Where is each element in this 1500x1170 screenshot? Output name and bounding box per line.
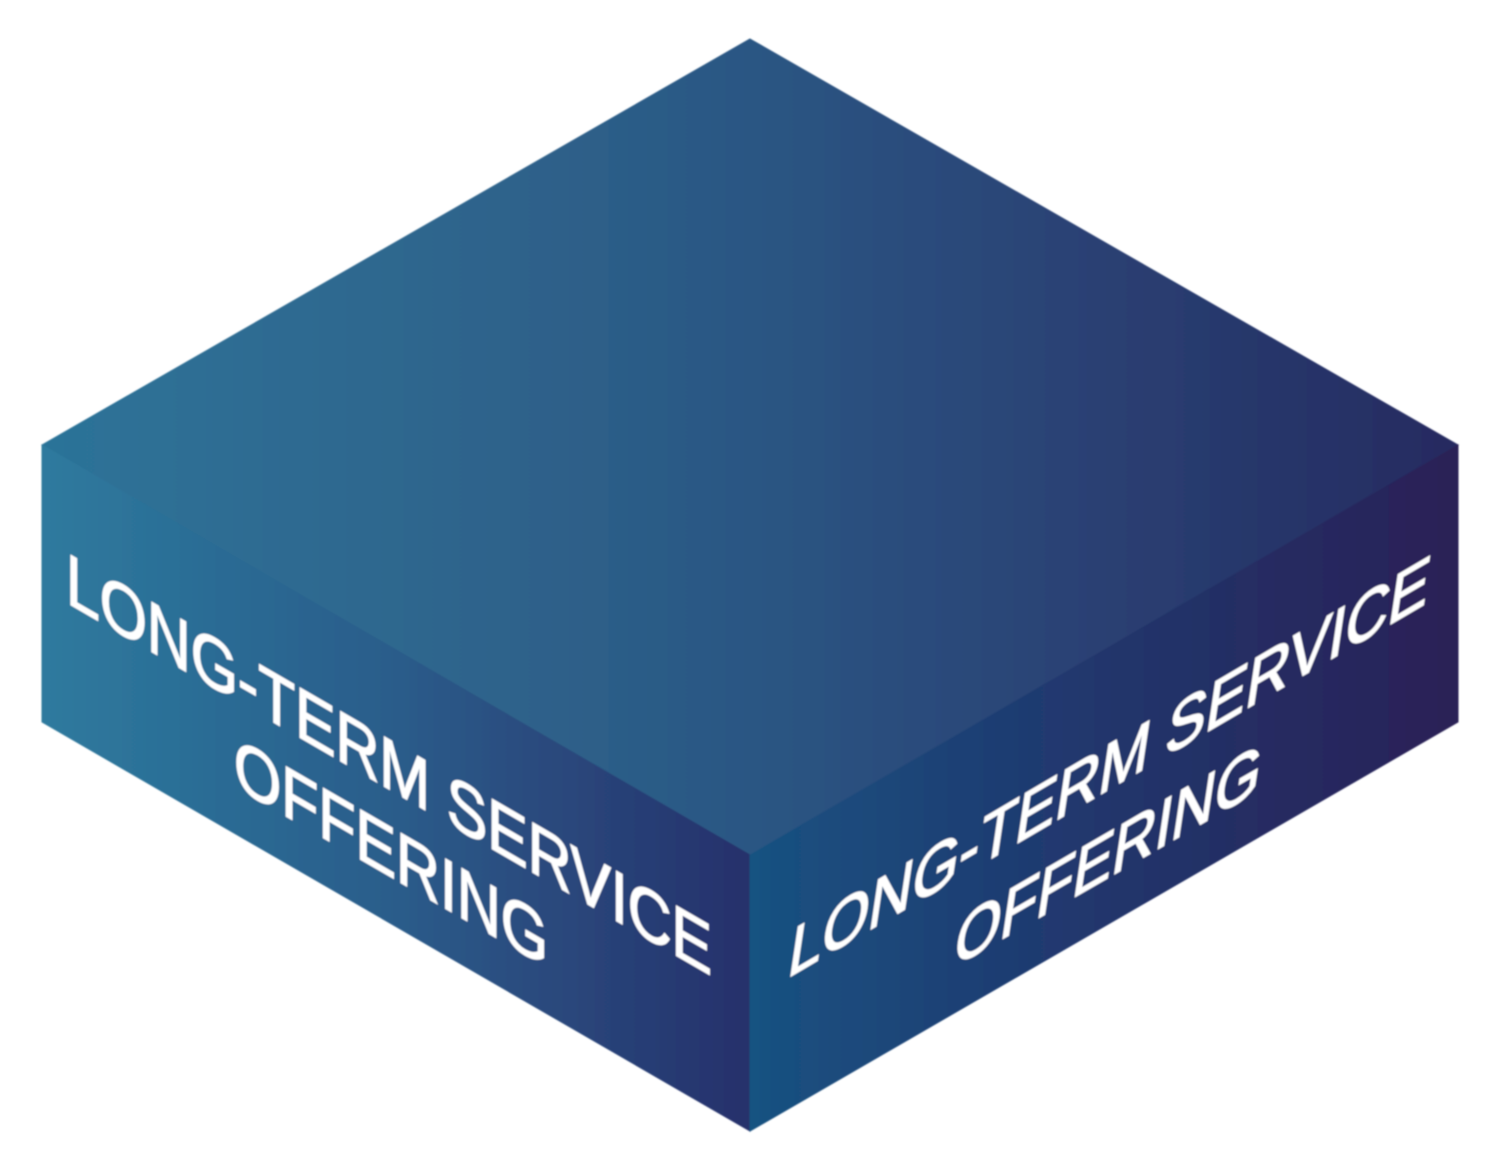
right face label: OFFERING — [950, 726, 1268, 984]
left face label: OFFERING — [234, 722, 548, 984]
left face of block — [42, 445, 750, 1131]
left face label: LONG-TERM SERVICE — [66, 538, 712, 992]
right face of block — [750, 445, 1458, 1131]
top face of block — [42, 39, 1458, 855]
